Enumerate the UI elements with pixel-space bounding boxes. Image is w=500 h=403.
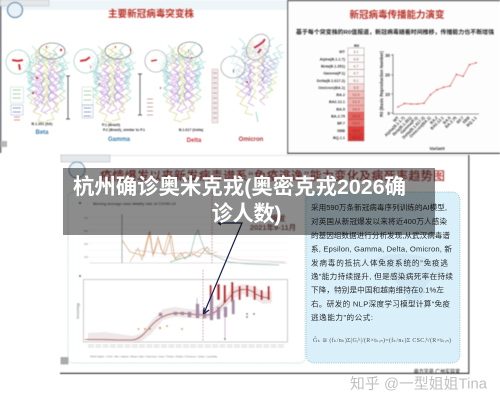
line chart: R0 by variant: Beta(B.1.351) (391, 115, 413, 137)
line chart: R0 by variant: Variant (429, 146, 445, 151)
line chart: R0 by variant: Delta(B.1.617.2) (401, 115, 426, 140)
chart: immune escape over time (76, 270, 288, 347)
heatmap table of R0 values: WT (339, 50, 346, 54)
line chart: R0 by variant: BA.2 (429, 115, 439, 125)
line chart: R0 by variant: BA.5 (442, 115, 452, 125)
protein: Beta: B.1.351 (SA) (32, 122, 53, 126)
heatmap table of R0 values: XBB (337, 129, 345, 133)
line chart: R0 by variant: 10 (385, 92, 391, 97)
text panel: model description: 发病毒的抵抗人体免疫系统的”免疫逃 (311, 258, 448, 268)
line chart: R0 by variant: 30 (385, 53, 391, 58)
line chart: moving average case fatality rate: 7% (84, 216, 89, 220)
heatmap table of R0 values: Alpha(B.1.1.7) (320, 57, 346, 61)
heatmap table of R0 values: 4.7 (353, 72, 359, 76)
line chart: moving average case fatality rate: 3% (84, 242, 89, 246)
annotation: outbreak period: 2021年9-11月 (250, 222, 296, 232)
heatmap table of R0 values: 20.0 (352, 114, 360, 118)
formula: Ĝₖ ≅ (fₖ/nₖ)Σ|Gᵢᵏ|/(R×tₖᵢₙ)=(fₖ/nₖ)Σ CSCᵢᵏ/(R×tₖᵢₙ) (313, 336, 451, 344)
protein: Gamma: P.1 (Brazil) (102, 123, 121, 127)
heading: transmissibility: 新冠病毒传播能力演变 (350, 9, 445, 21)
annotation: outbreak period (250, 213, 296, 232)
heatmap table of R0 values: 25.0 (352, 129, 360, 133)
heatmap table of R0 values: BF.7 (337, 122, 345, 126)
line chart: R0 by variant: WT (392, 115, 400, 123)
panel: immune escape and fatality trend (60, 155, 469, 375)
text panel: model description: 的基因组数据进行分析发现,从武汉病毒谱 (311, 230, 450, 240)
protein: Beta (6, 43, 70, 136)
line chart: R0 by variant: 0 (388, 111, 391, 116)
heatmap table of R0 values: R0 (354, 43, 360, 48)
heatmap table of R0 values: BQ.1.1 (333, 136, 345, 140)
title overlay band (63, 168, 435, 235)
line chart: R0 by variant: 20 (385, 72, 391, 78)
text panel: model description (306, 192, 460, 363)
text panel: model description: 右。研发的 NLP深度学习模型计算“免疫 (311, 298, 450, 308)
line chart: R0 by variant: XBB (461, 115, 471, 125)
heatmap table of R0 values: 26.0 (352, 136, 360, 140)
heatmap table of R0 values: 13.3 (352, 100, 360, 104)
title text: 诊人数) (212, 202, 282, 226)
line chart: moving average case fatality rate: 1% (84, 255, 89, 259)
icon: page button (1, 141, 7, 147)
heatmap table of R0 values: Gamma(P.1) (323, 72, 346, 76)
title text (73, 174, 406, 226)
legend: lineages: WHO label: ▪ GH/ ▪ Mu ▪ Alpha ▪ Beta ▪ Eta ▪ Gamma ▪ Iota ▪ Theta ▪ Delta ▪ Omicron ▪ Zeta ▪ Lambda (90, 354, 217, 358)
text panel: model description: 逸”能力持续提升, 但是感染病死率在持续 (311, 271, 453, 281)
heatmap table of R0 values: 19.0 (352, 122, 360, 126)
text panel: model description: 对英国从新冠爆发以来将近400万人感染 (311, 216, 447, 226)
text panel: model description: 下降，特别是中国和越南维持在0.1%左 (311, 284, 444, 294)
watermark: 知乎 @一型姐姐Tina (350, 376, 488, 392)
text panel: model description: 逃逸能力”的公式: (311, 312, 373, 322)
panel: transmissibility evolution (296, 9, 494, 151)
heatmap table of R0 values: BA2.12.1 (329, 100, 345, 104)
protein: Delta: Delta (187, 138, 202, 144)
line chart: moving average case fatality rate: Moving average case fatality rate of COVID-19 (93, 202, 176, 206)
heatmap table of R0 values: BA.2 (336, 93, 345, 97)
chart: immune escape over time: Sensorlogy (76, 303, 80, 319)
source note: 南方学苑 广州实验室 (414, 368, 460, 375)
protein: Delta: B.1.617 (India) (179, 128, 204, 132)
arrow: outbreak to chart (204, 223, 242, 314)
heatmap table of R0 values: BA.5 (336, 107, 345, 111)
line chart: R0 by variant: BF.7 (455, 115, 465, 125)
line chart: R0 by variant: Omicron(BA.1) (408, 115, 432, 139)
heatmap table of R0 values: 4.7 (353, 64, 359, 68)
logo (69, 162, 85, 178)
video toolbar (61, 155, 110, 162)
protein: Gamma: P.2 (Brazil), similar to P.1 (103, 128, 145, 132)
annotation: outbreak period: 爆发 (270, 213, 286, 223)
line chart: R0 by variant: BA.2.75 (444, 115, 458, 129)
heatmap table of R0 values (317, 43, 364, 141)
heatmap table of R0 values: 12.0 (352, 93, 360, 97)
text panel: model description: 系, Epsilon, Gamma, Delta, Omicron, 新 (311, 244, 452, 254)
dashed frame: charts (68, 192, 305, 363)
heatmap table of R0 values: 9.5 (353, 86, 359, 90)
icon: page button (60, 357, 68, 364)
line chart: R0 by variant: Gamma(P.1) (399, 115, 419, 135)
heatmap table of R0 values: 4.9 (353, 57, 359, 61)
line chart: R0 by variant (379, 50, 479, 151)
heatmap table of R0 values: 5.1 (353, 79, 359, 83)
subtitle: 基于每个突变株的R0值报道，新冠病毒随着时间推移，传播能力也不断增强 (296, 28, 494, 36)
protein: Beta: Beta (35, 130, 49, 136)
heatmap table of R0 values: Omicron(BA.1) (318, 86, 346, 90)
heading: immune escape: 疫情爆发以来新发病毒谱系“免疫逃逸”能力变化及病死率趋势图 (100, 168, 445, 183)
heatmap table of R0 values: 3.1 (353, 50, 359, 54)
heatmap table of R0 values: BA.2.75 (331, 114, 345, 118)
line chart: R0 by variant: BQ.1.1 (465, 115, 478, 128)
title text: 杭州确诊奥米克戎(奥密克戎2026确 (73, 174, 406, 199)
heatmap table of R0 values: Beta(B.1.351) (321, 64, 346, 68)
protein: Omicron: Omicron (239, 137, 264, 143)
protein: Delta (145, 42, 218, 144)
heatmap table of R0 values: 14.0 (352, 107, 360, 111)
line chart: moving average case fatality rate: 5% (84, 229, 89, 233)
line chart: R0 by variant: Alpha(B.1.1.7) (383, 115, 406, 138)
heatmap table of R0 values: Delta(B.1.617.2) (317, 79, 346, 83)
protein: Gamma (74, 43, 153, 143)
protein: Omicron (221, 30, 284, 143)
line chart: R0 by variant: R0 (Basic Reproduction Number) (379, 50, 384, 117)
video toolbar (0, 0, 49, 6)
line chart: R0 by variant: BA2.12.1 (429, 115, 445, 131)
background: screenshot collage (0, 0, 500, 154)
protein: Gamma: Gamma (108, 137, 131, 143)
logo (8, 2, 22, 18)
text panel: model description: 采用590万条新冠病毒序列训练的AI模型, (311, 202, 447, 212)
line chart: moving average case fatality rate (79, 193, 287, 265)
heading: variants: 主要新冠病毒突变株 (108, 8, 194, 20)
panel: main SARS-CoV-2 variants (0, 0, 284, 147)
